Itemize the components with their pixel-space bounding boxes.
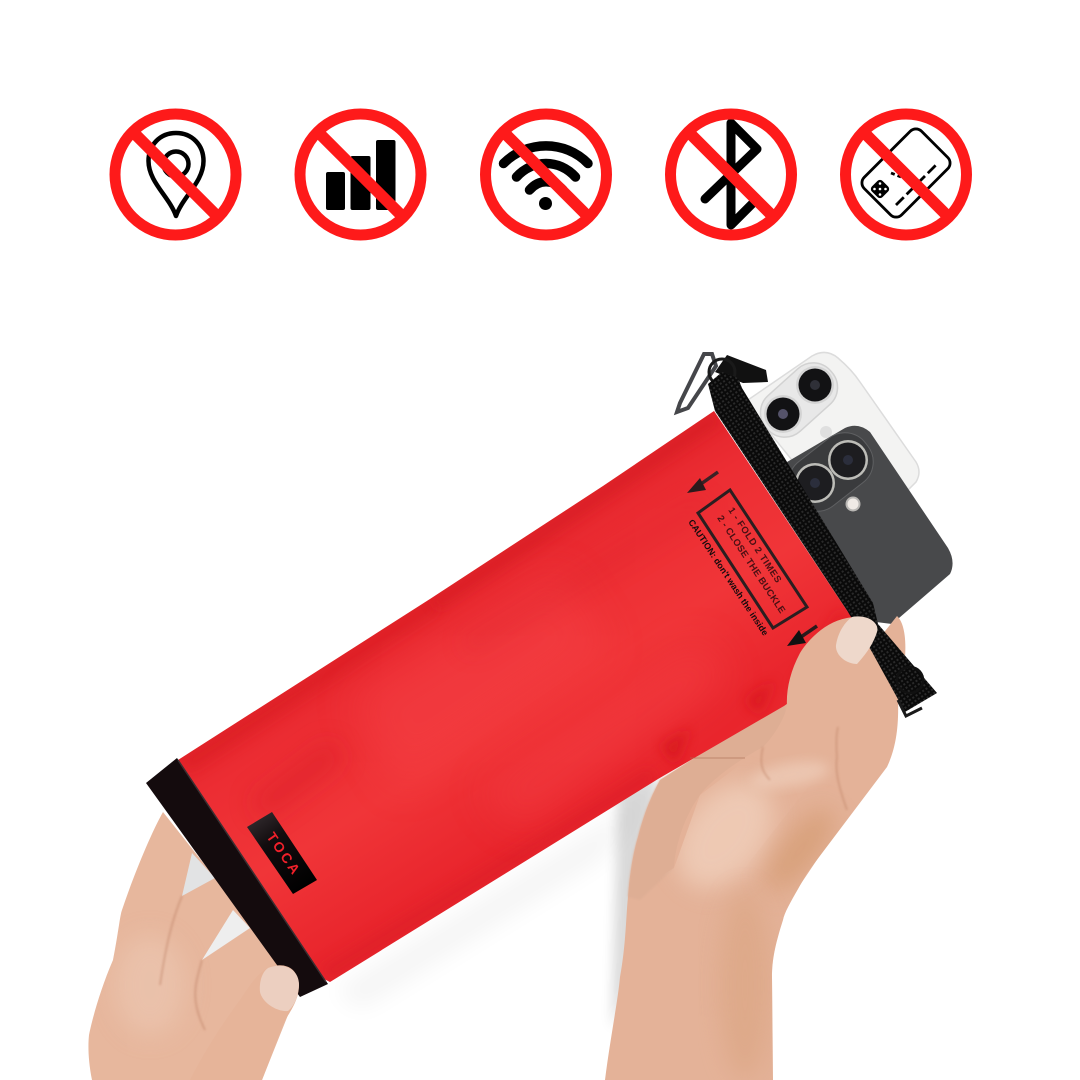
instruction box: [698, 490, 807, 628]
arrow: fold direction bottom: [787, 626, 817, 646]
finger gap: middle and ring: [202, 910, 250, 960]
icon: no cellular signal: [300, 114, 421, 235]
pouch logo label: TOCA: [264, 829, 303, 877]
photo: left thumb: [190, 965, 299, 1080]
icon: no SIM card: [846, 114, 966, 235]
caution text: CAUTION: don't wash the inside: [686, 518, 770, 637]
pouch printed instructions: [686, 472, 817, 646]
photo: dark phone: [778, 422, 953, 624]
photo: carabiner and buckle: [677, 354, 768, 412]
photo: right thumbnail: [836, 616, 877, 664]
arrow: fold direction top: [687, 472, 718, 493]
icon: no bluetooth: [670, 114, 792, 235]
photo: red pouch: [178, 411, 878, 982]
photo: right thumb and back of hand: [674, 617, 877, 1069]
photo: fingers under the pouch: [628, 700, 790, 900]
photo: webbing strap: [708, 372, 937, 716]
photo: pouch end band: [146, 758, 328, 997]
icon: no location: [115, 114, 236, 235]
instruction text: 2 - CLOSE THE BUCKLE: [714, 514, 787, 616]
finger gap: index and middle: [182, 853, 215, 896]
photo: white phone: [745, 352, 919, 492]
photo: left hand: [88, 812, 300, 1080]
icon: no wifi: [486, 114, 606, 235]
instruction text: 1 - FOLD 2 TIMES: [725, 506, 783, 585]
soft shadows under the pouch and hands: [335, 775, 660, 1030]
pouch logo label: [247, 812, 317, 894]
photo: right hand silhouette: [605, 616, 905, 1080]
